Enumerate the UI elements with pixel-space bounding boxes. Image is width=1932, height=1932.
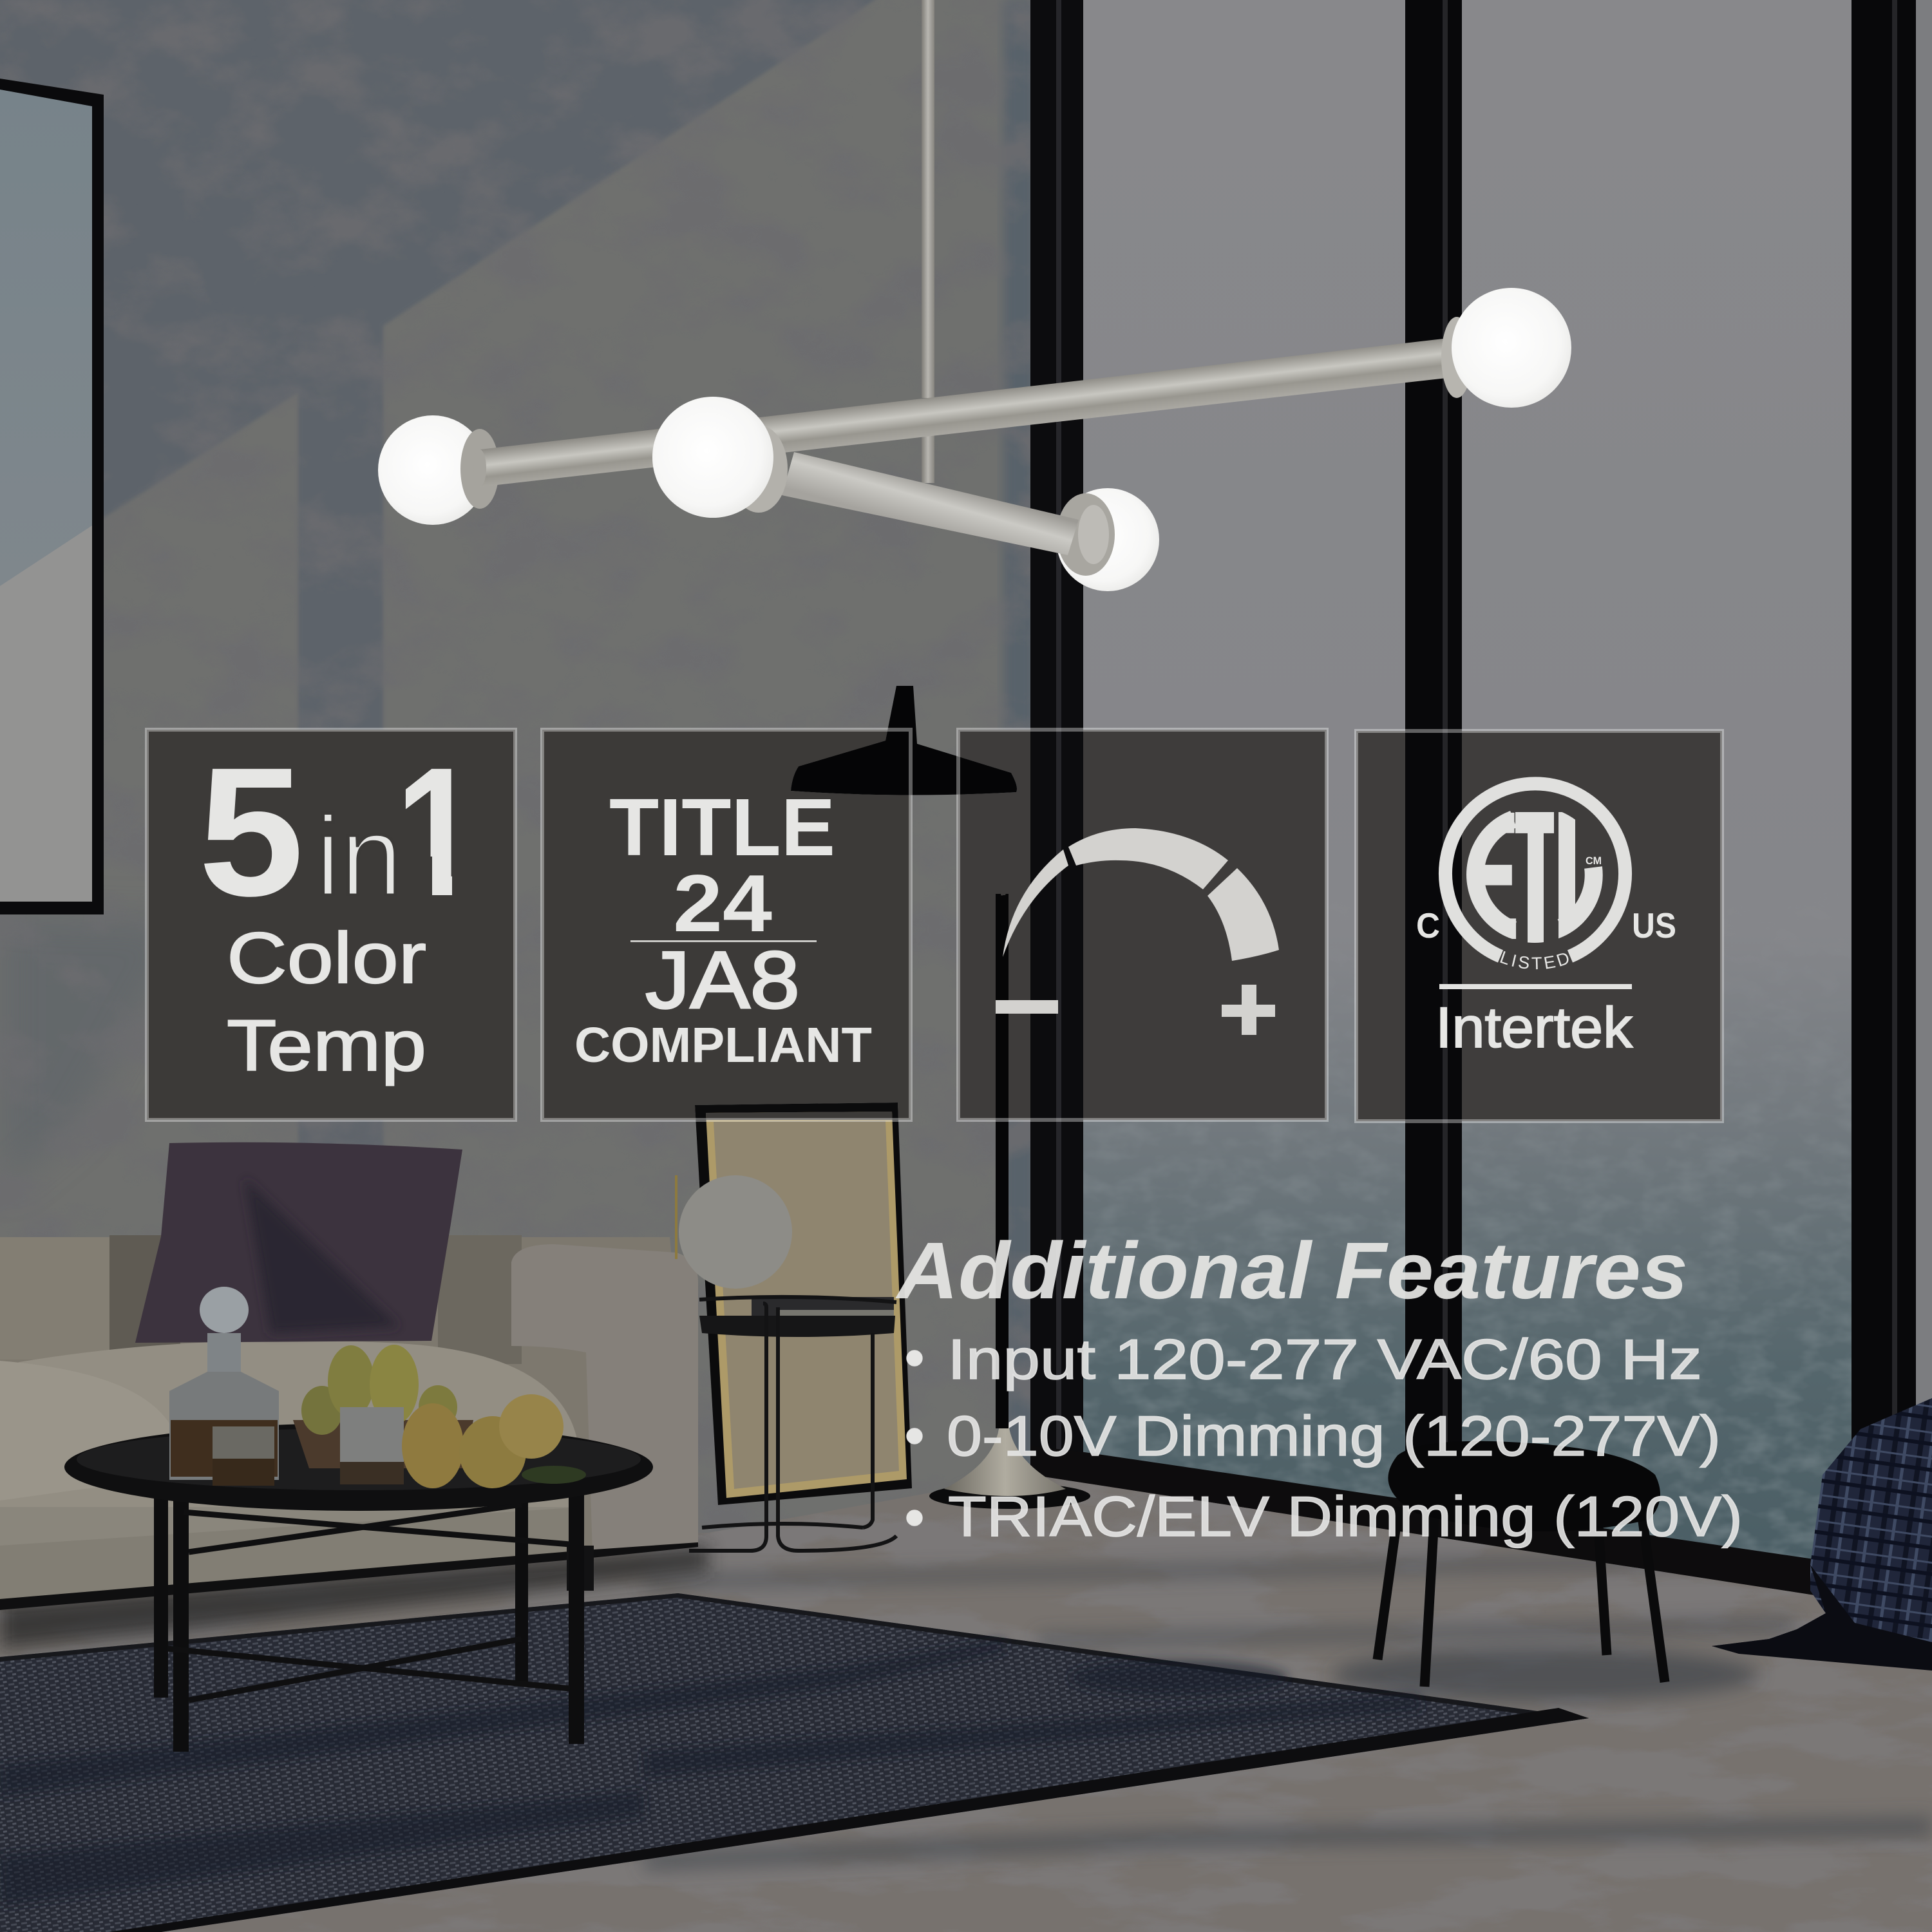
background: concrete wall	[0, 0, 1043, 1610]
chandelier	[378, 0, 1571, 591]
panel: ETL listed Intertek	[1354, 729, 1724, 1123]
list: feature bullets: TRIAC/ELV Dimming (120V)	[948, 1484, 1743, 1548]
icon: ETL listed mark	[1416, 777, 1676, 970]
background: floor	[0, 1449, 1932, 1932]
label: title 24: 24	[673, 858, 772, 949]
framed picture on wall	[0, 79, 104, 914]
icon: ETL listed mark: T	[1502, 771, 1570, 983]
panel: dimming dial	[958, 730, 1327, 1120]
pillow	[135, 1142, 462, 1343]
icon: ETL listed mark: US	[1632, 905, 1676, 945]
icon: dimmer arc with minus and plus	[996, 828, 1279, 1035]
table lamp globe	[675, 1175, 792, 1289]
leaning canvas frame	[695, 1103, 912, 1505]
coffee table	[64, 1423, 653, 1752]
label: color temp: Temp	[227, 1005, 426, 1086]
background: windows with fog view	[1030, 0, 1932, 1616]
panel: title 24 JA8 compliant	[542, 730, 911, 1120]
label: JA8 compliant	[574, 934, 872, 1073]
label: title 24: TITLE	[609, 782, 835, 873]
sofa	[0, 1235, 698, 1610]
label: color temp: Color	[227, 918, 426, 998]
label: JA8 compliant: JA8	[645, 934, 800, 1025]
icon: ETL listed mark: C	[1416, 905, 1440, 945]
panel: 5 in 1 color temp	[147, 730, 515, 1120]
side table	[689, 1297, 896, 1551]
heading: 5 in 1: in	[316, 793, 402, 920]
label: JA8 compliant: COMPLIANT	[574, 1018, 872, 1073]
list: feature bullets: Input 120-277 VAC/60 Hz	[947, 1327, 1702, 1391]
label: color temp	[227, 918, 426, 1086]
list: feature bullets: 0-10V Dimming (120-277V)	[947, 1404, 1721, 1468]
heading: 5 in 1: 5	[198, 730, 304, 934]
list: feature bullets	[907, 1327, 1743, 1548]
rug	[0, 1593, 1589, 1932]
icon: ETL listed mark: L	[1551, 771, 1622, 983]
icon: ETL listed mark: E	[1465, 773, 1519, 978]
label: Intertek: Intertek	[1435, 995, 1633, 1059]
heading: 5 in 1	[204, 769, 452, 897]
stool	[1378, 1441, 1665, 1687]
decanter, glasses and fruit	[169, 1287, 586, 1488]
heading: additional features: Additional Features	[895, 1226, 1688, 1316]
floor lamp	[791, 686, 1090, 1509]
icon: ETL listed mark: LISTED	[1500, 951, 1569, 970]
heading: 5 in 1: 1	[395, 730, 479, 934]
plaid blanket	[1712, 1398, 1932, 1671]
icon: ETL listed mark: CM	[1586, 855, 1602, 867]
label: title 24	[609, 782, 835, 949]
